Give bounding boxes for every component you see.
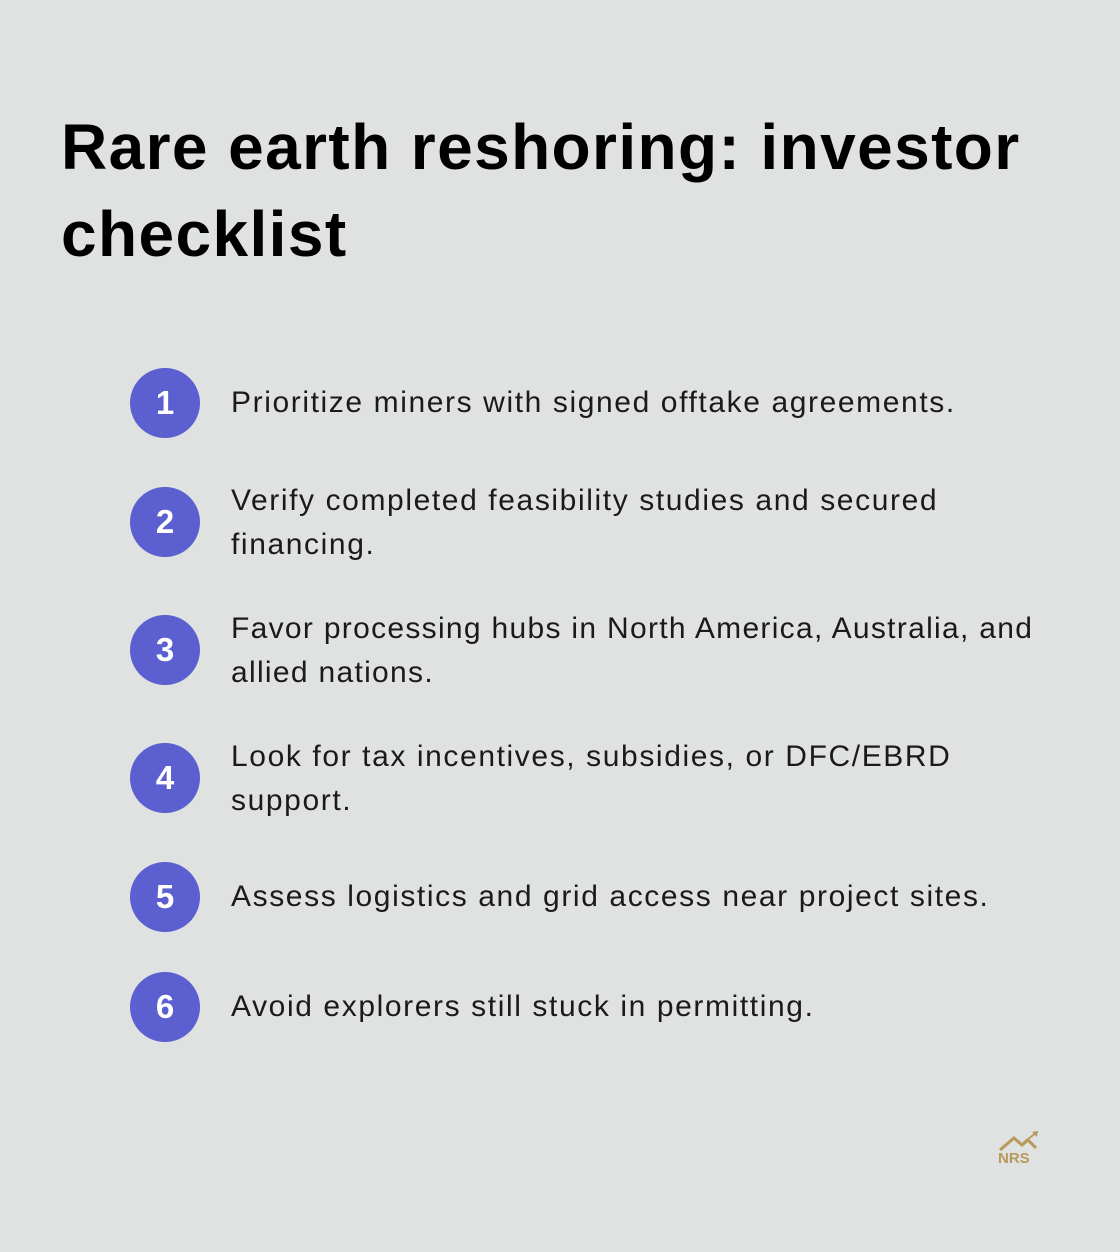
item 1: Prioritize miners with signed offtake agreements. [231, 386, 956, 419]
title: Rare earth reshoring: investor [61, 111, 1021, 183]
item 1: 1 [156, 384, 174, 421]
item 4: support. [231, 784, 352, 817]
title [61, 111, 1021, 270]
item 2: Verify completed feasibility studies and secured [231, 484, 938, 517]
item 4 [130, 740, 951, 817]
item 2 [130, 484, 938, 561]
item 3: allied nations. [231, 656, 434, 689]
logo: NRS: NRS [998, 1150, 1030, 1167]
logo: NRS [998, 1131, 1038, 1167]
item 4: Look for tax incentives, subsidies, or DFC/EBRD [231, 740, 951, 773]
item 5 [130, 862, 990, 932]
item 2: 2 [156, 503, 174, 540]
item 4: 4 [156, 759, 174, 796]
item 1 [130, 368, 956, 438]
item 3: Favor processing hubs in North America, Australia, and [231, 612, 1033, 645]
item 6: Avoid explorers still stuck in permitting. [231, 990, 815, 1023]
item 3 [130, 612, 1033, 689]
title: checklist [61, 198, 348, 270]
item 6 [130, 972, 815, 1042]
item 3: 3 [156, 631, 174, 668]
item 5: Assess logistics and grid access near project sites. [231, 880, 990, 913]
item 2: financing. [231, 528, 375, 561]
item 6: 6 [156, 988, 174, 1025]
item 5: 5 [156, 878, 174, 915]
